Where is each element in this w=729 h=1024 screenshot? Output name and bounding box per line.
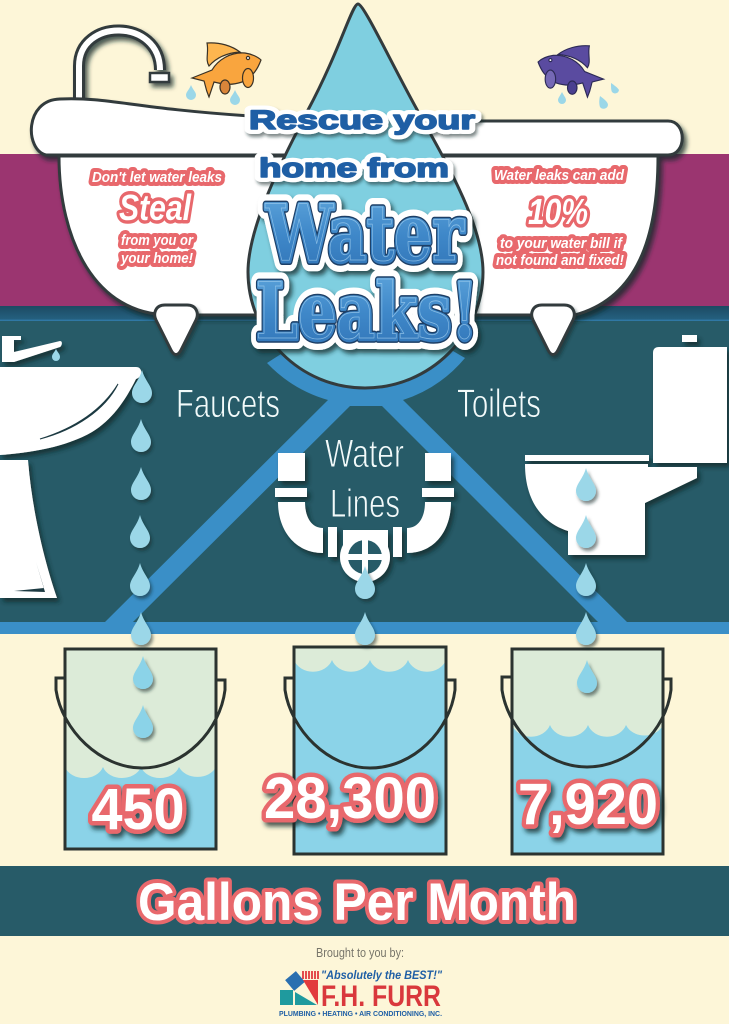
drop: toilet inside bucket	[577, 660, 597, 693]
logo icon	[280, 971, 318, 1005]
fish: gold	[192, 43, 261, 97]
label: Faucets: Faucets	[176, 382, 280, 426]
label: Water Lines: Lines	[330, 482, 400, 526]
band: magenta	[0, 154, 729, 307]
right tub text: not found and fixed!	[496, 253, 624, 269]
title line: Rescue your: Rescue your	[249, 105, 476, 135]
bucket: faucets 450	[56, 649, 225, 849]
right tub text	[494, 168, 625, 269]
title word: Leaks!: Leaks!	[256, 266, 478, 357]
icon: sink	[0, 336, 141, 598]
heading: Gallons Per Month: Gallons Per Month	[138, 873, 576, 932]
number: 7,920: 7,920	[518, 772, 658, 837]
tub bowl	[59, 156, 658, 315]
footer band	[0, 866, 729, 936]
fish: purple	[538, 46, 604, 97]
icon: tub faucet	[79, 30, 169, 102]
band: teal leak area	[0, 306, 729, 634]
title word: Leaks!: Leaks!	[256, 267, 478, 358]
logo slogan: "Absolutely the BEST!"	[321, 970, 443, 982]
credit line: Brought to you by:	[316, 945, 404, 960]
left tub text: Don't let water leaks	[92, 170, 222, 186]
left tub text	[92, 170, 222, 267]
right tub text: 10%	[528, 191, 588, 232]
title word: Leaks!: Leaks!	[256, 267, 478, 358]
label: Water Lines	[325, 432, 404, 526]
right tub text: to your water bill if	[500, 236, 624, 252]
title word: Water: Water	[265, 189, 465, 280]
drops: faucet inside bucket	[133, 656, 153, 738]
bucket: water lines 28,300	[285, 647, 455, 854]
tub foot: left	[155, 305, 197, 354]
icon: water line pipes	[275, 453, 454, 582]
logo: F.H. Furr	[279, 970, 443, 1018]
title line: Rescue your: Rescue your	[249, 105, 476, 135]
bathtub	[31, 99, 682, 315]
right tub text: Water leaks can add	[494, 168, 625, 184]
valve wheel	[348, 540, 382, 574]
left tub text: your home!	[120, 251, 193, 267]
icon: toilet	[525, 335, 727, 555]
drops: faucet column	[130, 370, 152, 645]
title line: home from: home from	[259, 153, 449, 183]
sink details	[14, 349, 118, 592]
label: Toilets: Toilets	[457, 382, 541, 426]
drops: water line column	[355, 566, 375, 645]
number: 28,300: 28,300	[264, 766, 436, 831]
title word: Water: Water	[265, 189, 465, 280]
title	[249, 105, 478, 358]
title line: home from: home from	[259, 153, 449, 183]
title word: Water: Water	[265, 189, 465, 280]
title word: Water: Water	[265, 188, 464, 279]
logo name: F.H. FURR	[321, 980, 441, 1013]
number: 450: 450	[92, 777, 184, 842]
label: Water Lines: Water	[325, 432, 404, 476]
splash drops	[186, 83, 619, 109]
logo services: PLUMBING • HEATING • AIR CONDITIONING, INC.	[279, 1011, 442, 1018]
tub foot: right	[532, 305, 574, 354]
title word: Leaks!: Leaks!	[256, 267, 478, 358]
big water drop	[248, 4, 483, 388]
tub rim	[31, 99, 682, 155]
left tub text: from you or	[121, 233, 194, 249]
connector: blue ring and diagonals	[105, 300, 627, 622]
left tub text: Steal	[119, 187, 192, 228]
bucket: toilets 7,920	[502, 649, 671, 854]
drops: toilet column	[576, 468, 596, 645]
